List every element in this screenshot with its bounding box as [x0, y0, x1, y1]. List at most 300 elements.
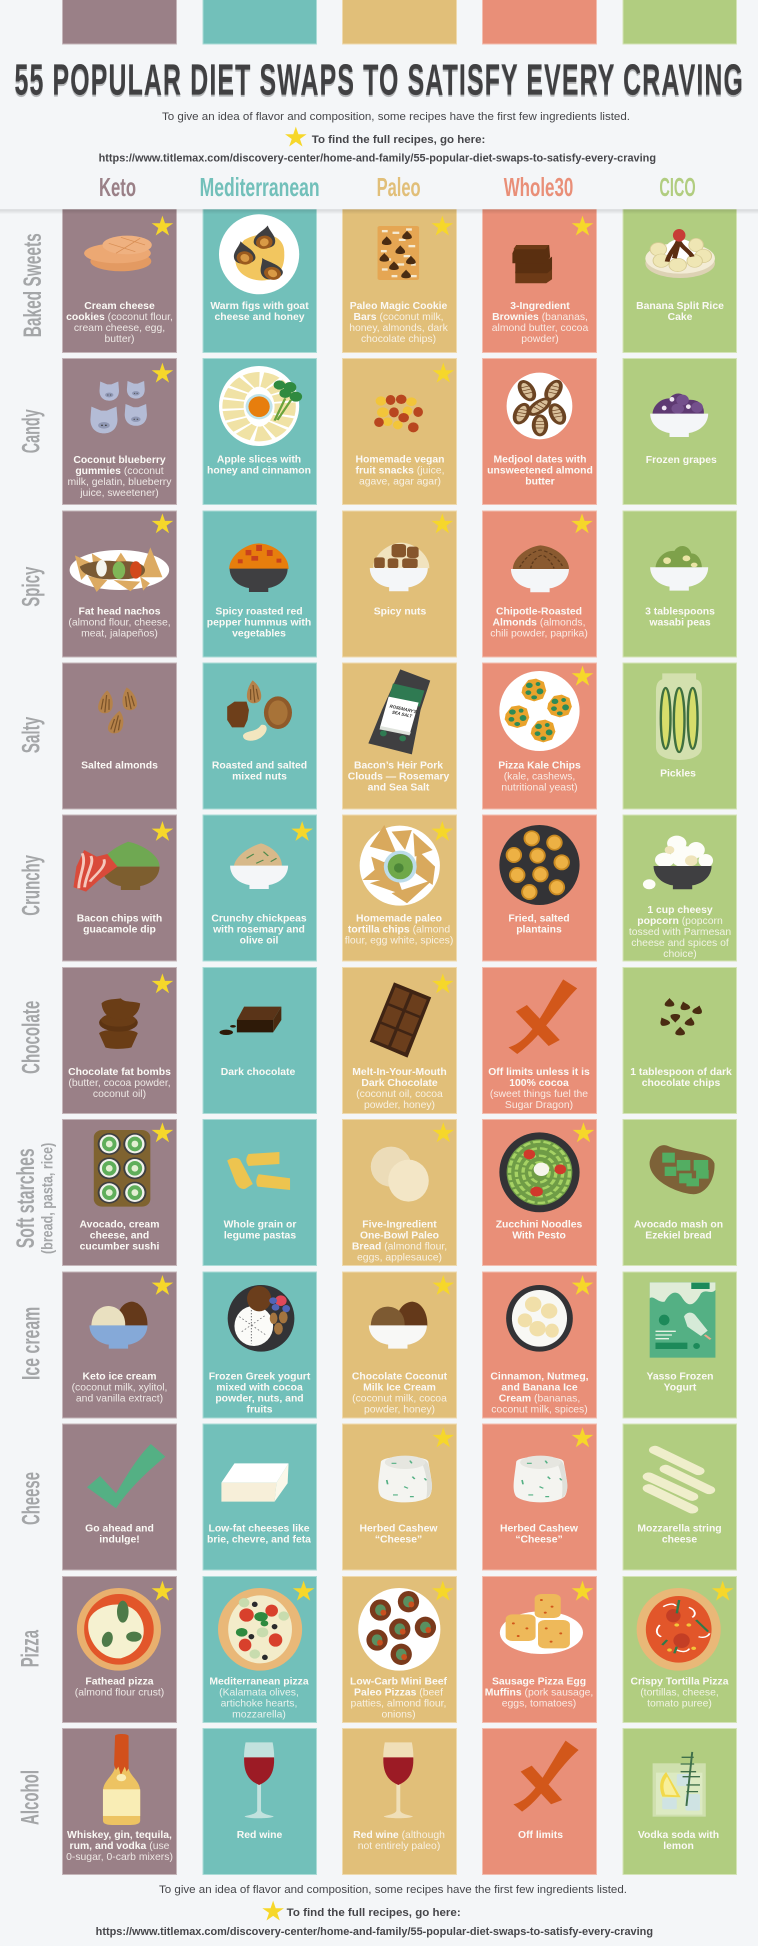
caption: guacamole dip	[83, 925, 156, 936]
row label: Ice cream: Ice cream	[18, 1307, 46, 1380]
card: chipotle almonds	[482, 511, 596, 657]
card: bacon chips with guacamole	[62, 815, 176, 961]
caption: Keto ice cream	[83, 1371, 156, 1382]
card: apple slices	[203, 358, 316, 504]
icon: zucchini noodles on dark plate	[499, 1132, 580, 1212]
column headings: Paleo	[377, 172, 421, 202]
star	[432, 973, 454, 993]
star	[152, 1122, 173, 1142]
footer star legend: To find the full recipes, go here:	[287, 1907, 461, 1919]
caption: Avocado mash on	[634, 1219, 723, 1230]
card: whiskey gin tequila	[62, 1728, 176, 1874]
caption: Sausage Pizza Egg	[492, 1677, 586, 1688]
star	[152, 216, 173, 236]
caption: Dark chocolate	[221, 1067, 295, 1078]
caption: 3 tablespoons	[645, 607, 715, 618]
icon: pasta	[227, 1152, 290, 1190]
caption: One-Bowl Paleo	[360, 1230, 439, 1241]
card: crunchy chickpeas	[203, 815, 316, 961]
caption: milk, gelatin, blueberry	[68, 477, 172, 488]
card: yasso frozen yogurt	[623, 1272, 736, 1418]
star	[572, 1275, 593, 1295]
card: medjool dates	[482, 358, 596, 504]
caption: chili powder, paprika)	[490, 629, 588, 640]
icon: chocolate bar	[370, 982, 431, 1058]
caption: Milk Ice Cream	[363, 1382, 436, 1393]
card: melt-in-your-mouth chocolate	[342, 968, 456, 1114]
caption: Zucchini Noodles	[496, 1219, 583, 1230]
caption: Apple slices with	[217, 454, 301, 466]
icon: sushi tray	[94, 1130, 150, 1207]
caption: wasabi peas	[648, 618, 711, 629]
caption: cheese and honey	[214, 312, 305, 323]
caption: coconut milk, spices)	[491, 1404, 588, 1415]
caption: Whiskey, gin, tequila,	[67, 1830, 172, 1841]
caption: Pickles	[660, 768, 696, 779]
card: wasabi peas	[623, 511, 736, 657]
card: bacon's heir pork clouds	[342, 663, 456, 809]
column headings	[99, 172, 696, 202]
star	[152, 821, 173, 841]
caption: agave, agar agar)	[359, 476, 441, 488]
icon: mini pizzas on plate	[358, 1588, 440, 1671]
icon: chocolate block	[219, 1007, 281, 1035]
row label: Soft starches: Soft starches	[12, 1148, 40, 1248]
caption: Fathead pizza	[85, 1677, 154, 1688]
caption: (almond flour, cheese,	[68, 618, 171, 629]
card: coconut blueberry gummies	[62, 358, 176, 504]
card: whole grain pastas	[203, 1120, 316, 1266]
icon: snack bag: SEA SALT	[391, 710, 413, 719]
card: herbed cashew cheese whole30	[482, 1424, 596, 1570]
caption: powder)	[521, 334, 559, 345]
caption: 3-Ingredient	[510, 301, 570, 312]
caption: Pizza Kale Chips	[498, 761, 581, 772]
caption: Bars (coconut milk,	[353, 312, 444, 323]
caption: coconut oil)	[93, 1089, 146, 1100]
card: 3-ingredient brownies	[482, 206, 596, 352]
caption: 1 tablespoon of dark	[630, 1067, 732, 1078]
card: avocado cucumber sushi	[62, 1120, 176, 1266]
icon: snack bag: ROSEMARY'S	[389, 704, 418, 714]
star	[712, 1581, 733, 1601]
caption: Warm figs with goat	[210, 301, 309, 312]
star	[573, 1122, 594, 1142]
star	[432, 1122, 454, 1142]
icon: fat bombs stack	[99, 998, 140, 1049]
icon: pickle jar	[656, 673, 702, 760]
caption: plantains	[516, 925, 562, 936]
star	[572, 216, 593, 236]
icon: rice cake	[645, 229, 715, 278]
caption: Homemade paleo	[356, 914, 442, 925]
card: salted almonds	[62, 663, 176, 809]
icon: chocolate chips	[657, 998, 704, 1035]
caption: Whole grain or	[224, 1219, 296, 1230]
card: dark chocolate chips	[623, 968, 736, 1114]
row label: Soft starches	[12, 1143, 56, 1254]
caption: rum, and vodka (use	[70, 1841, 169, 1852]
row label: Salty: Salty	[18, 717, 46, 753]
card: fathead pizza	[62, 1576, 176, 1722]
caption: Crunchy chickpeas	[211, 914, 307, 925]
caption: cheese and spices of	[631, 938, 729, 949]
column headings: CICO	[659, 172, 696, 202]
row label: Cheese: Cheese	[18, 1472, 46, 1525]
icon: banana ice cream plate	[506, 1285, 573, 1352]
header star legend	[285, 127, 485, 147]
card: spicy hummus	[203, 511, 316, 657]
caption: Brownies (bananas,	[492, 312, 588, 323]
caption: flour, egg white, spices)	[345, 936, 453, 947]
caption: (kale, cashews,	[504, 772, 575, 783]
caption: Frozen Greek yogurt	[209, 1371, 311, 1382]
card: red wine mediterranean	[203, 1728, 316, 1874]
icon: nuts in bowl	[370, 543, 429, 591]
card: pickles	[623, 663, 736, 809]
caption: Off limits unless it is	[488, 1067, 590, 1078]
caption: honey, almonds, dark	[349, 323, 449, 334]
caption: tortilla chips (almond	[348, 925, 450, 936]
card: frozen grapes	[623, 358, 736, 504]
caption: indulge!	[99, 1535, 140, 1546]
caption: honey and cinnamon	[207, 466, 311, 476]
caption: Yogurt	[664, 1382, 697, 1393]
caption: (sweet things fuel the	[490, 1089, 588, 1100]
card: go ahead and indulge	[62, 1424, 176, 1570]
caption: Spicy roasted red	[215, 607, 303, 618]
caption: fruit snacks (juice,	[356, 466, 444, 476]
icon: bread rounds	[371, 1147, 429, 1202]
caption: Clouds — Rosemary	[348, 772, 450, 783]
card: keto ice cream	[62, 1272, 176, 1418]
card: sausage pizza egg muffins	[482, 1576, 596, 1722]
caption: Mozzarella string	[637, 1524, 722, 1535]
card: crispy tortilla pizza	[623, 1576, 736, 1722]
icon: almonds	[98, 687, 138, 734]
header mask over first card row	[0, 206, 758, 209]
caption: (almond flour crust)	[75, 1688, 164, 1699]
icon: plantains on dark plate	[499, 825, 580, 905]
caption: Fat head nachos	[78, 607, 161, 618]
row label: Chocolate: Chocolate	[18, 1001, 46, 1074]
icon: yasso box	[650, 1282, 715, 1358]
caption: (coconut milk, cocoa	[352, 1393, 447, 1404]
card: mediterranean pizza	[203, 1576, 316, 1722]
card: avocado mash on ezekiel bread	[623, 1120, 736, 1266]
caption: cookies (coconut flour,	[66, 312, 173, 323]
card: vegan fruit snacks	[342, 358, 456, 504]
card: cheesy popcorn	[623, 815, 736, 961]
caption: cucumber sushi	[80, 1241, 159, 1252]
caption: almond butter, cocoa	[492, 323, 588, 334]
icon: brownies	[512, 245, 552, 283]
star	[432, 1427, 454, 1447]
caption: mixed with cocoa	[216, 1382, 303, 1393]
icon: avocado toast	[650, 1145, 715, 1194]
icon: bacon and guacamole bowl	[73, 842, 160, 892]
header drop shadow strip	[0, 209, 758, 214]
top color stripes	[62, 0, 736, 44]
caption: and Sea Salt	[368, 783, 430, 794]
star	[432, 1581, 454, 1601]
star	[432, 513, 453, 533]
caption: Almonds (almonds,	[493, 618, 585, 629]
caption: butter)	[104, 334, 135, 345]
star	[571, 513, 593, 533]
icon: margherita pizza	[77, 1588, 161, 1671]
card: low-fat cheeses	[203, 1424, 316, 1570]
icon: cashew cheese	[514, 1456, 567, 1502]
caption: Ezekiel bread	[645, 1230, 712, 1241]
caption: vegetables	[232, 629, 286, 640]
column headings: Whole30	[504, 172, 573, 202]
caption: Herbed Cashew	[500, 1524, 579, 1535]
row label: Spicy: Spicy	[18, 567, 46, 607]
caption: cheese, and	[90, 1230, 149, 1241]
caption: fruits	[247, 1404, 273, 1415]
star	[432, 216, 453, 236]
caption: Muffins (pork sausage,	[485, 1688, 593, 1699]
icon: string cheese	[649, 1450, 709, 1509]
icon: cheese block	[221, 1463, 289, 1502]
caption: Crispy Tortilla Pizza	[631, 1677, 729, 1688]
caption: powder, honey)	[364, 1404, 435, 1415]
caption: with rosemary and	[212, 925, 305, 936]
caption: Chocolate fat bombs	[68, 1067, 171, 1078]
caption: unsweetened almond	[487, 466, 593, 476]
card: banana split rice cake	[623, 206, 736, 352]
icon: cookies	[84, 236, 152, 271]
caption: Chipotle-Roasted	[496, 607, 582, 618]
card: frozen greek yogurt	[203, 1272, 316, 1418]
column headings: Keto	[99, 172, 136, 202]
card: off limits	[482, 1728, 596, 1874]
icon: figs on plate	[219, 214, 299, 294]
card: dark chocolate	[203, 968, 316, 1114]
icon: orange X	[513, 1741, 579, 1812]
caption: chocolate chips	[642, 1078, 720, 1089]
caption: Spicy nuts	[374, 607, 426, 618]
caption: Mediterranean pizza	[209, 1677, 309, 1688]
star	[152, 513, 173, 533]
card: five-ingredient bread	[342, 1120, 456, 1266]
card: paleo magic cookie bars	[342, 206, 456, 352]
caption: Roasted and salted	[212, 761, 307, 772]
icon: egg muffins on plate	[500, 1594, 583, 1654]
icon: fruit snacks	[374, 395, 423, 432]
caption: Chocolate Coconut	[352, 1371, 448, 1382]
caption: powder, nuts, and	[215, 1393, 304, 1404]
star	[432, 1275, 454, 1295]
caption: gummies (coconut	[75, 466, 164, 477]
caption: Sugar Dragon)	[505, 1100, 573, 1111]
row label: Pizza: Pizza	[16, 1629, 44, 1667]
caption: brie, chevre, and feta	[207, 1535, 311, 1546]
caption: olive oil	[240, 936, 278, 947]
card: mozzarella string cheese	[623, 1424, 736, 1570]
icon: wine glass	[244, 1742, 274, 1818]
icon: hummus bowl	[229, 543, 289, 592]
caption: chocolate chips)	[361, 334, 436, 345]
header url: https://www.titlemax.com/discovery-center/home-and-family/55-popular-diet-swaps-to-satisfy-every-craving	[99, 152, 656, 164]
caption: Cinnamon, Nutmeg,	[490, 1371, 589, 1382]
icon: cashew cheese	[378, 1456, 432, 1502]
caption: Paleo Magic Cookie	[350, 301, 448, 312]
caption: With Pesto	[512, 1230, 566, 1241]
caption: mozzarella)	[232, 1710, 286, 1721]
caption: cheese	[662, 1535, 697, 1546]
footer intro text: To give an idea of flavor and composition, some recipes have the first few ingredients listed.	[159, 1884, 627, 1896]
caption: Five-Ingredient	[362, 1219, 437, 1230]
star	[432, 363, 454, 383]
caption: powder, honey)	[364, 1100, 435, 1111]
caption: patties, almond flour,	[351, 1699, 446, 1710]
header star legend: To find the full recipes, go here:	[312, 134, 485, 146]
icon: green check	[87, 1444, 165, 1508]
caption: Bread (almond flour,	[352, 1241, 447, 1252]
card: fat head nachos	[62, 511, 176, 657]
caption: Bacon’s Heir Pork	[354, 761, 443, 772]
card: chocolate coconut milk ice cream	[342, 1272, 456, 1418]
card: warm figs	[203, 206, 316, 352]
caption: lemon	[663, 1841, 694, 1852]
card: red wine paleo	[342, 1728, 456, 1874]
icon: gummy pigs	[90, 381, 147, 433]
card: cinnamon nutmeg banana ice cream	[482, 1272, 596, 1418]
caption: Low-fat cheeses like	[208, 1524, 310, 1535]
caption: Melt-In-Your-Mouth	[352, 1067, 447, 1078]
card: vodka soda with lemon	[623, 1728, 736, 1874]
card: paleo tortilla chips	[342, 815, 456, 961]
row label: Soft starches: (bread, pasta, rice)	[40, 1143, 56, 1254]
icon: ice cream bowl	[89, 1302, 147, 1349]
star	[152, 363, 173, 383]
card: cream cheese cookies	[62, 206, 176, 352]
caption: “Cheese”	[515, 1535, 563, 1546]
caption: Avocado, cream	[80, 1219, 159, 1230]
caption: nutritional yeast)	[501, 783, 578, 794]
icon: wine glass	[383, 1742, 413, 1818]
caption: Salted almonds	[81, 761, 158, 772]
caption: tomato puree)	[647, 1699, 712, 1710]
card: herbed cashew cheese paleo	[342, 1424, 456, 1570]
caption: eggs, applesauce)	[357, 1252, 442, 1263]
icon: yogurt plate	[228, 1285, 294, 1352]
caption: choice)	[663, 949, 697, 960]
icon: kale chips on plate	[499, 671, 580, 751]
header intro text: To give an idea of flavor and composition, some recipes have the first few ingredients listed.	[162, 111, 630, 123]
icon: snack bag	[368, 669, 430, 754]
caption: (coconut oil, cocoa	[356, 1089, 443, 1100]
row label: Candy: Candy	[18, 409, 46, 453]
caption: meat, jalapeños)	[81, 629, 158, 640]
icon: popcorn bowl	[643, 836, 713, 889]
icon: nachos	[70, 547, 169, 592]
caption: Low-Carb Mini Beef	[350, 1677, 448, 1688]
icon: almonds in bowl	[511, 545, 569, 592]
caption: (Kalamata olives,	[219, 1688, 299, 1699]
caption: Vodka soda with	[638, 1830, 719, 1841]
card: low-carb mini beef pizzas	[342, 1576, 456, 1722]
icon: wasabi peas in bowl	[650, 546, 708, 591]
caption: Frozen grapes	[646, 455, 717, 466]
row label: Alcohol: Alcohol	[16, 1770, 44, 1825]
star	[152, 1275, 173, 1295]
caption: not entirely paleo)	[358, 1841, 440, 1852]
footer star legend	[262, 1901, 461, 1921]
icon: chocolate ice cream bowl	[369, 1302, 427, 1349]
card: fried plantains	[482, 815, 596, 961]
caption: “Cheese”	[375, 1535, 422, 1546]
caption: Coconut blueberry	[73, 455, 166, 466]
caption: Homemade vegan	[356, 454, 444, 466]
card: chocolate fat bombs	[62, 968, 176, 1114]
caption: 1 cup cheesy	[647, 905, 713, 916]
footer url: https://www.titlemax.com/discovery-center/home-and-family/55-popular-diet-swaps-to-satisfy-every-craving	[96, 1926, 653, 1938]
caption: and vanilla extract)	[76, 1393, 163, 1404]
star	[291, 821, 313, 841]
caption: 0-sugar, 0-carb mixers)	[66, 1852, 173, 1863]
caption: Herbed Cashew	[360, 1524, 438, 1535]
card: off limits unless 100% cocoa	[482, 968, 596, 1114]
icon: apple slices on plate	[219, 366, 302, 446]
caption: (tortillas, cheese,	[640, 1688, 719, 1699]
caption: mixed nuts	[232, 772, 287, 783]
caption: eggs, tomatoes)	[502, 1699, 576, 1710]
caption: Paleo Pizzas (beef	[354, 1688, 443, 1699]
icon: vodka soda glass	[653, 1752, 706, 1817]
icon: whiskey bottle	[103, 1734, 140, 1825]
caption: (coconut milk, xylitol,	[72, 1382, 167, 1393]
icon: chips with dip on plate	[360, 825, 440, 906]
card: zucchini noodles	[482, 1120, 596, 1266]
caption: 100% cocoa	[509, 1078, 569, 1089]
icon: mixed nuts	[227, 680, 292, 741]
star	[152, 973, 173, 993]
icon: mediterranean pizza	[218, 1588, 302, 1671]
caption: Red wine (although	[353, 1830, 445, 1841]
caption: (butter, cocoa powder,	[68, 1078, 171, 1089]
caption: Cream cheese	[84, 301, 155, 312]
star	[572, 666, 593, 686]
caption: Go ahead and	[85, 1524, 154, 1535]
caption: onions)	[381, 1710, 416, 1721]
caption: popcorn (popcorn	[637, 916, 723, 927]
caption: tossed with Parmesan	[629, 927, 731, 938]
star	[432, 821, 453, 841]
caption: cream cheese, egg,	[74, 323, 165, 334]
star	[572, 1581, 593, 1601]
icon: cookie bar	[378, 226, 419, 280]
icon: chickpeas in bowl	[230, 843, 288, 889]
column headings: Mediterranean	[200, 172, 320, 202]
caption: and Banana Ice	[501, 1382, 578, 1393]
caption: pepper hummus with	[207, 618, 311, 629]
caption: juice, sweetener)	[79, 488, 159, 499]
caption: Fried, salted	[508, 914, 570, 925]
caption: Cream (bananas,	[499, 1393, 580, 1404]
row label: Crunchy: Crunchy	[18, 855, 46, 916]
caption: Cake	[668, 312, 693, 323]
caption: legume pastas	[224, 1230, 296, 1241]
card: spicy nuts	[342, 511, 456, 657]
star	[293, 1581, 314, 1601]
caption: Bacon chips with	[77, 914, 162, 925]
star	[572, 1427, 593, 1447]
icon: tortilla pizza	[637, 1588, 721, 1671]
star	[152, 1581, 173, 1601]
